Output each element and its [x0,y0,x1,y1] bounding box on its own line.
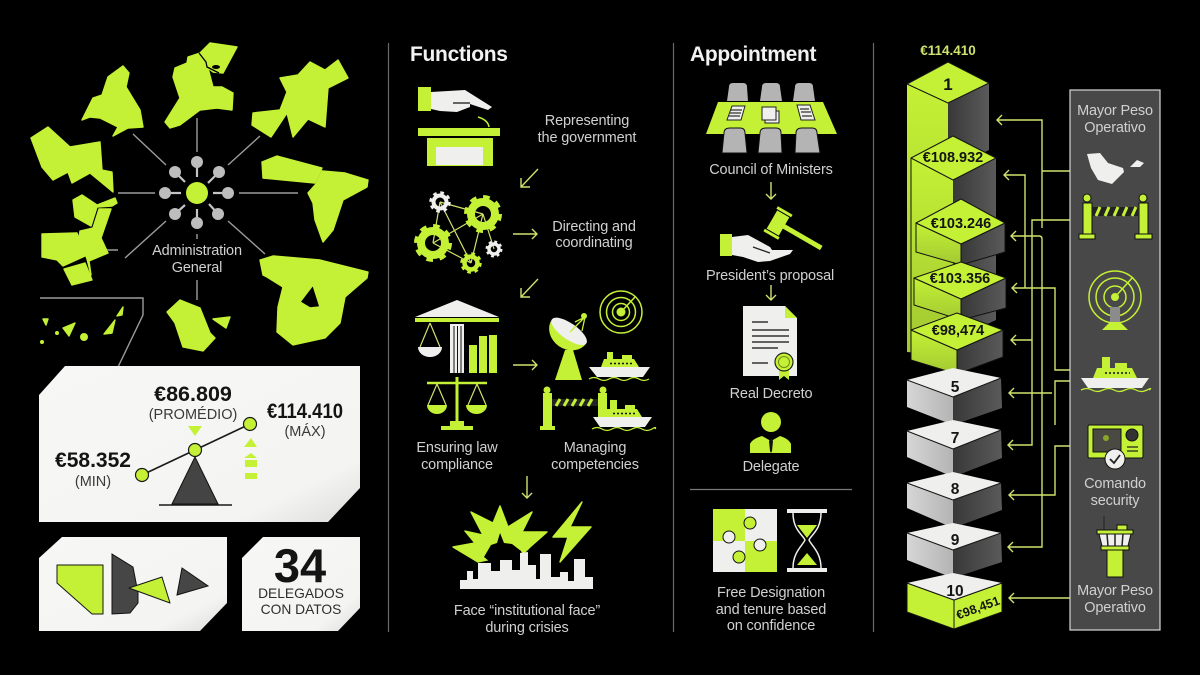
icon: explosion over city [453,502,593,589]
block rank 5 [907,368,1002,425]
text: Mayor Peso Operativo bottom [1077,583,1153,616]
text: Ensuring law compliance: compliance [421,457,493,473]
block 4 [914,262,1006,320]
text: Directing and coordinating [552,219,636,251]
icon: central hub [159,156,234,229]
map: east coast group [42,195,117,285]
panel: 34 delegates card: DELEGADOS [258,586,344,601]
text: Comando security: Comando [1084,476,1146,492]
icon: satellite dish [542,313,591,380]
stat: maximum: €114.410 [267,399,343,423]
icon: ship [1081,357,1151,392]
text: Council of Ministers: Council of Ministers [709,162,833,178]
arrow [766,182,776,199]
icon: law pediment and charts [415,300,499,373]
icon: balance scale [136,418,257,505]
label: top value: €114.410 [920,43,976,58]
text: Mayor Peso Operativo top: Mayor Peso [1077,103,1153,119]
icon: ship [589,352,650,380]
arrow [521,169,538,187]
block rank 8 [907,472,1002,528]
arrow [521,279,538,297]
chart: ranking stack [907,43,1006,629]
stat: minimum: (MIN) [75,474,111,490]
text: Ensuring law compliance: Ensuring law [416,440,498,456]
block 2: €108.932 [923,150,983,166]
text: Real Decreto: Real Decreto [730,386,812,402]
map: top-left region [82,66,143,136]
icon: puzzle [713,509,777,572]
map: Canary Islands inset [40,298,143,367]
icon: gears network [416,192,502,272]
text: Directing and coordinating: coordinating [555,235,633,251]
block 5 lime [911,313,1003,374]
block rank 10: €98,451 [954,594,1002,622]
text: Managing competencies: competencies [551,457,639,473]
text: Directing and coordinating: Directing and [552,219,636,235]
block 2 [911,136,996,355]
icon: control tower [1097,516,1133,577]
map: left region [31,127,113,192]
stat: average: €86.809 [154,382,232,406]
icon: hourglass [787,509,827,572]
heading: Functions: Functions [410,43,508,66]
block 3: €103.246 [931,216,991,232]
stat: minimum [55,448,131,490]
block rank 8: 8 [951,481,960,498]
arrow [513,229,537,239]
icon: islands [1087,153,1144,184]
stat: average [149,382,237,423]
stat: minimum: €58.352 [55,448,131,472]
heading: Appointment: Appointment [690,43,816,66]
divider [690,488,852,490]
map: right region [262,156,368,242]
column dividers [388,43,874,632]
map: top-right region [252,60,348,137]
icon: radar tower [1089,271,1141,330]
block rank 7: 7 [951,430,959,447]
icon: barrier and ship [540,386,656,430]
stat: maximum [267,399,343,440]
label: Administration General [152,243,242,276]
spokes [107,118,298,300]
text: Free Designation [716,585,826,634]
arrows: connectors [997,115,1070,603]
text: Managing competencies: Managing [564,440,626,456]
map: bottom region [167,300,230,351]
text: Free Designation: Free Designation [717,585,825,601]
label: Administration General: Administration [152,243,242,259]
block rank 10: 10 [946,583,964,600]
icon: delegate person [750,412,791,453]
icon: decree document [743,306,797,380]
text: Face institutional face during crisies [454,603,600,636]
icon: barrier [1079,194,1152,239]
text: Delegate: Delegate [743,459,800,475]
panel: operational weight [1070,90,1160,630]
panel: 34 delegates card [242,537,360,631]
text: Mayor Peso Operativo bottom: Operativo [1084,600,1146,616]
arrow [766,285,776,300]
block rank 9 [907,523,1002,578]
text: Face institutional face during crisies: Face “institutional face” [454,603,600,619]
label: Administration General: General [172,260,222,276]
block rank 5: 5 [951,379,960,396]
icon: council table [706,83,837,153]
map: Spain [260,256,368,345]
arrow [513,360,537,370]
icon: hand over podium [418,87,500,166]
text: President's proposal: President’s proposal [706,268,834,284]
text: Managing competencies [551,440,639,473]
block 5 lime: €98,474 [932,323,984,339]
panel: 34 delegates card: CON DATOS [261,602,341,617]
text: Mayor Peso Operativo top [1077,103,1153,136]
panel: salary balance card [39,366,360,522]
arrow [522,476,532,498]
text: Ensuring law compliance [416,440,498,473]
icon: security device [1088,425,1143,469]
text: Representing the government [538,113,636,146]
block 1: 1 [943,75,953,94]
icon: radar [600,291,642,333]
text: Representing the government: the government [538,130,636,146]
block rank 7 [907,420,1002,477]
text: Comando security: security [1091,493,1140,509]
panel: regional map hub [31,43,368,367]
text: Mayor Peso Operativo top: Operativo [1084,120,1146,136]
text: Comando security [1084,476,1146,509]
text: Face institutional face during crisies: during crisies [485,620,569,636]
text: Free Designation: and tenure based [716,602,826,618]
block rank 9: 9 [951,532,960,549]
block 3 [916,199,1005,265]
text: Representing the government: Representing [545,113,629,129]
text: Free Designation: on confidence [727,618,815,634]
icon: gavel and hand [720,206,829,262]
icon: scales of justice [427,377,487,430]
stat: average: (PROMÉDIO) [149,406,237,423]
stat: maximum: (MÁX) [284,423,326,440]
text: Mayor Peso Operativo bottom: Mayor Peso [1077,583,1153,599]
map: top-centre region [165,43,237,128]
panel: shapes card [39,537,227,631]
panel: 34 delegates card: 34 [274,539,326,592]
block 4: €103.356 [930,271,990,287]
block 1 [907,62,989,355]
block rank 10 [907,573,1002,629]
